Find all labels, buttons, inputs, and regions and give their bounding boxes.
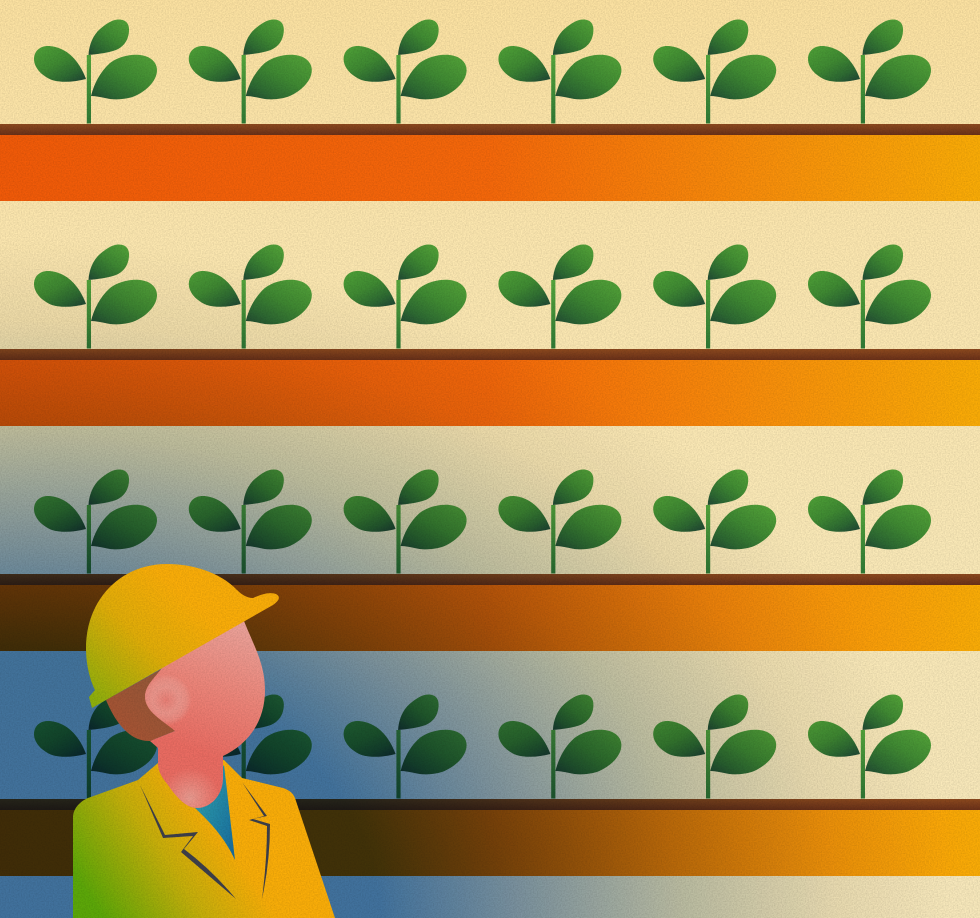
hard hat	[86, 564, 279, 708]
seedling row 1	[34, 20, 931, 124]
seedling row 4	[34, 694, 931, 798]
shirt	[195, 765, 235, 860]
soil band row 4	[0, 799, 980, 876]
soil band row 1	[0, 124, 980, 201]
hair	[106, 667, 175, 741]
head and neck	[145, 610, 265, 808]
ear	[145, 677, 190, 724]
soil band row 2	[0, 349, 980, 426]
neck highlight	[168, 773, 215, 808]
worker figure	[73, 564, 335, 918]
jacket	[73, 760, 335, 918]
seedling row 3	[34, 470, 931, 574]
soil band row 3	[0, 574, 980, 651]
seedling row 2	[34, 244, 931, 348]
left lapel line	[140, 785, 236, 899]
right lapel line	[242, 782, 270, 899]
